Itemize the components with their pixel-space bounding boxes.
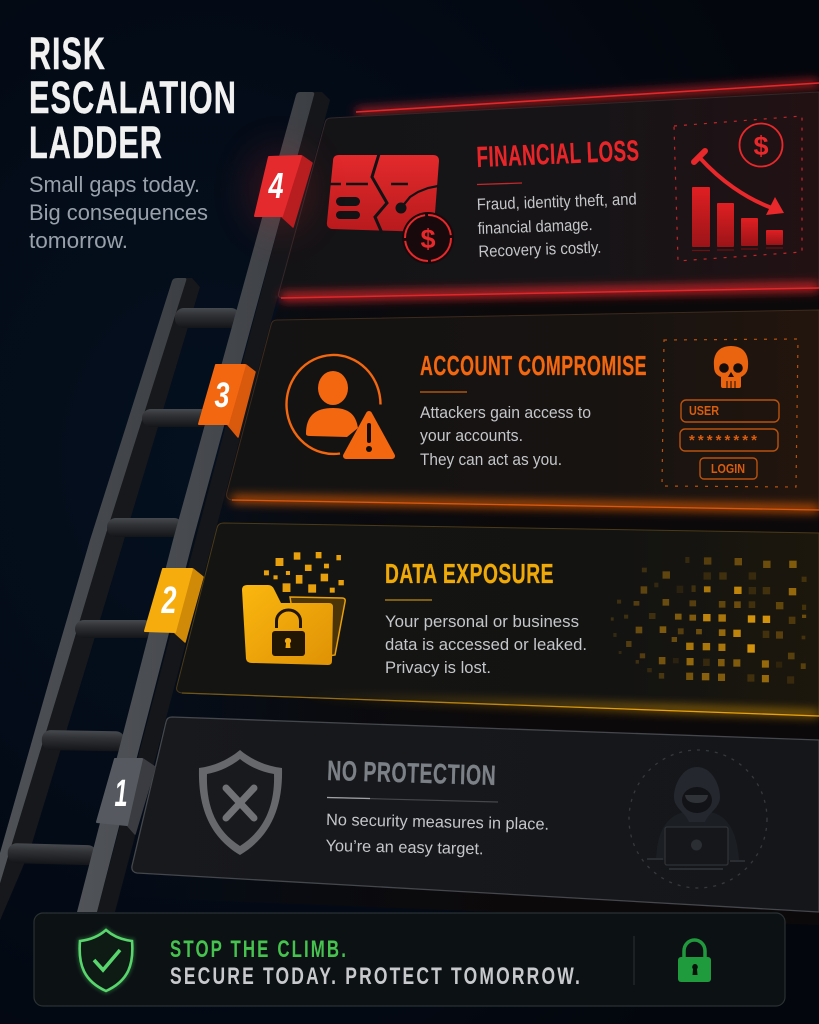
badge 2: 2 [161,580,176,622]
body text: Recovery is costly. [478,239,602,261]
body text [477,190,639,261]
body text: data is accessed or leaked. [385,636,587,654]
divider [420,391,467,393]
title: LADDER [29,117,163,168]
body text: Your personal or business [385,613,579,631]
divider [385,599,432,601]
panel body [227,310,819,510]
login button: LOGIN [711,461,745,476]
badge 4 [250,150,312,230]
bars [692,187,783,247]
chart: falling bars [674,116,802,261]
tagline: SECURE TODAY. PROTECT TOMORROW. [170,963,582,990]
panel: data exposure [177,523,819,716]
body text: They can act as you. [420,451,562,469]
icon: dollar coin small [740,124,782,166]
subtitle: Small gaps today. [29,172,200,197]
heading: FINANCIAL LOSS [476,135,640,174]
subtitle [29,172,208,253]
body text: Fraud, identity theft, and [477,190,637,214]
heading: NO PROTECTION [327,755,497,791]
heading: ACCOUNT COMPROMISE [420,350,647,381]
username field [681,400,779,422]
divider [477,183,522,184]
panel glow [356,83,819,112]
data scatter [611,557,807,684]
body text [385,613,587,677]
title [29,28,237,168]
title: RISK [29,28,106,79]
badge 4: 4 [268,165,284,206]
panel: account compromise [227,310,819,510]
panel: financial loss [278,83,819,298]
icon: dollar coin small: $ [753,131,769,161]
heading: STOP THE CLIMB. [170,936,348,963]
badge 3 [199,365,255,437]
password field: ******** [689,432,757,449]
login button [700,458,757,479]
subtitle: tomorrow. [29,228,128,253]
icon: dollar coin [402,212,454,264]
badge 2 [145,569,203,642]
rungs [7,308,240,865]
icon: green lock [678,940,711,982]
body text: Attackers gain access to [420,404,591,422]
panel body [177,523,819,716]
icon: data particles [264,552,344,593]
username field: USER [689,403,720,418]
login mock [662,339,798,487]
right rail [77,92,330,912]
icon: shield with cross [199,750,282,855]
badge 1 [97,759,155,834]
icon: broken credit card [327,154,439,233]
panel body [132,717,819,912]
badge 1: 1 [114,773,128,815]
panel: no protection [132,717,819,912]
icon: user alert [286,355,392,456]
body text [420,404,591,469]
body text: You’re an easy target. [325,837,484,858]
divider [633,936,635,985]
backing plate [123,83,819,925]
icon: green shield check [80,930,132,991]
footer banner [34,913,785,1006]
icon: locked folder [242,585,345,665]
icon: skull [714,346,748,388]
icon: hacker [629,750,767,888]
body text: financial damage. [477,216,593,238]
divider [327,798,498,802]
body text: No security measures in place. [326,811,549,834]
arrow: downward trend [694,151,784,215]
badge 3: 3 [214,376,230,415]
body text: your accounts. [420,427,523,445]
password field [680,429,778,451]
title: ESCALATION [29,72,237,123]
ladder [0,92,330,925]
body text: Privacy is lost. [385,659,491,677]
left rail [0,278,200,925]
icon: dollar coin: $ [420,224,436,254]
panel body [278,92,819,298]
body text [325,811,549,860]
subtitle: Big consequences [29,200,208,225]
heading: DATA EXPOSURE [385,558,554,589]
